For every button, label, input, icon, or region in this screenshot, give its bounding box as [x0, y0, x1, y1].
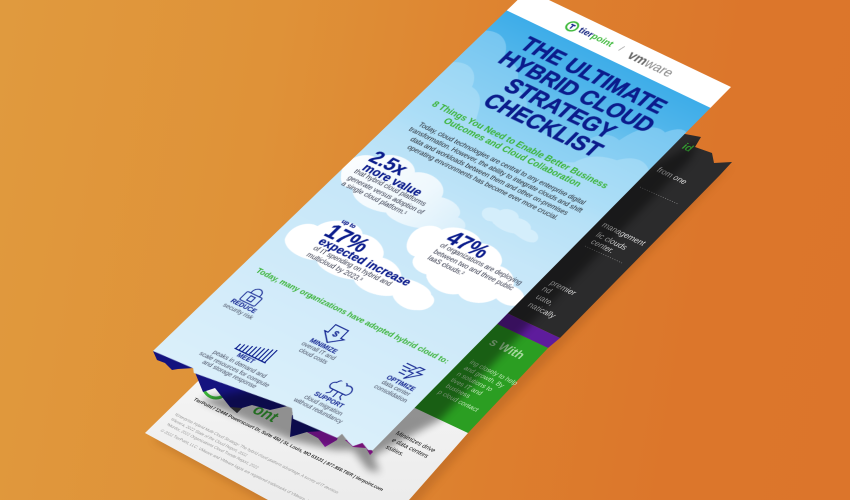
dark section of lower sheet — [490, 130, 732, 338]
magenta torn strip tip — [345, 438, 373, 455]
item: minimize: cloud costs — [297, 347, 329, 366]
stat: 47 percent — [427, 232, 523, 290]
footer sheet copy: ssities. — [383, 444, 406, 458]
stat: 17 percent — [306, 220, 410, 286]
body copy on green section — [435, 359, 519, 413]
sky clouds — [406, 30, 686, 206]
item: optimize: consolidation — [372, 384, 409, 404]
sheet shadow on background — [152, 165, 732, 500]
subtitle: Outcomes and Cloud Collaboration — [441, 116, 584, 189]
dark tear fragment — [230, 407, 242, 413]
section heading: Today, many organizations have adopted hybrid cloud to: — [254, 266, 452, 365]
item: meet: MEET — [235, 352, 257, 365]
item: support — [294, 380, 354, 424]
cloud: 2.5x — [340, 154, 466, 230]
vmware wordmark: vmware — [624, 48, 678, 80]
body copy on green section: tives IT and — [448, 377, 484, 397]
stat: 2.5x more value — [341, 151, 426, 214]
cloud: light distant — [482, 208, 538, 242]
body copy on green section: business — [443, 383, 472, 400]
footer logo fragment — [203, 372, 284, 425]
body copy on dark section: nd — [539, 284, 555, 295]
intro paragraph: operating environments has become ever more crucial. — [405, 143, 561, 221]
tierpoint wordmark: tierpoint — [576, 26, 616, 49]
footer sheet copy: Minimizes drive — [393, 430, 438, 454]
intro paragraph: Today, cloud technologies are central to any enterprise digital — [416, 121, 588, 206]
stat: 17 percent: of IT spending on hybrid and — [311, 245, 393, 288]
footer sheet copy: e data centers — [389, 437, 431, 460]
cloud: 17 percent — [284, 220, 434, 310]
body copy on dark section: center. — [588, 237, 617, 255]
title: STRATEGY — [498, 75, 621, 143]
item: support: cloud migration — [302, 394, 344, 417]
body copy on dark section: management — [599, 220, 649, 248]
stat: 17 percent: expected increase — [315, 235, 415, 289]
body copy on green section: and growth. By — [461, 365, 506, 389]
stat: 2.5x more value: 2.5x — [364, 147, 413, 179]
item: optimize: OPTIMIZE — [384, 374, 417, 393]
item: support: without redundancy — [291, 397, 344, 425]
purple band — [478, 305, 560, 348]
navy torn strip right — [290, 415, 330, 438]
green section — [398, 315, 548, 433]
stat: 2.5x more value: more value — [359, 161, 426, 199]
stat: 47 percent: IaaS clouds.² — [425, 255, 466, 277]
navy torn strip centre — [194, 370, 292, 413]
divider slash: / — [616, 45, 626, 53]
footer sheet copy — [383, 430, 438, 460]
icon: dollar down arrow: $ — [316, 322, 325, 323]
title: THE ULTIMATE — [514, 33, 672, 118]
stat: 17 percent: up to — [340, 219, 358, 230]
title — [484, 36, 669, 156]
stat: 47 percent: 47% — [441, 227, 495, 263]
footer references: ²Flexera, 2022 State of the Cloud Report, 2022 — [169, 417, 249, 458]
item: reduce: REDUCE — [228, 298, 258, 315]
background clouds — [284, 154, 538, 310]
icon: cloud migration — [325, 380, 354, 400]
footer references: ³Mordor, 2022 Organizations Cloud Trends Report, 2022 — [165, 422, 261, 470]
item: meet: peaks in demand and — [211, 349, 268, 380]
white footer section of lower sheet — [145, 340, 468, 500]
icon: dollar down arrow — [324, 324, 350, 344]
stat: 2.5x more value: that hybrid cloud platforms — [352, 168, 428, 208]
subtitle: 8 Things You Need to Enable Better Business — [429, 100, 611, 191]
green heading fragment: s With — [486, 336, 528, 362]
stat: 47 percent: of organizations are deploying — [438, 242, 524, 286]
stat: 2.5x more value: generate versus adoption of — [346, 174, 426, 216]
stat: 17 percent: 17% — [319, 220, 376, 257]
item: optimize — [374, 362, 426, 403]
body copy on dark section: premier — [547, 278, 579, 297]
icon: ascending bars — [234, 344, 278, 364]
intro paragraph: transformation. However, the ability to integrate clouds and shift — [407, 125, 585, 214]
stat: 17 percent: multicloud by 2023.³ — [305, 251, 365, 283]
footer logo fragment: ont — [248, 402, 284, 425]
icon: padlock — [239, 288, 264, 307]
cloud: 47 percent — [406, 226, 524, 306]
item: minimize: MINIMIZE — [308, 337, 339, 355]
footer references: ¹Enterprise Hybrid Multi-Cloud Strategy: The hybrid cloud platform advantage. A survey of IT decision — [173, 412, 341, 495]
body copy on dark section: from one — [654, 165, 690, 186]
item: reduce — [222, 288, 264, 320]
body copy on dark section: natically — [525, 300, 559, 320]
item: support: SUPPORT — [312, 390, 346, 410]
shadow of the checklist on lower sheet — [200, 140, 700, 472]
magenta torn strip — [307, 430, 340, 447]
body copy on dark section — [525, 165, 690, 320]
body copy on green section: p cloud contact — [435, 389, 480, 413]
item: reduce: security risk — [221, 302, 255, 321]
body copy on green section: ing closely to help — [467, 359, 519, 387]
body copy on dark section: lic clouds — [593, 230, 630, 252]
panel: checklist page — [148, 0, 731, 460]
body copy on dark section: uate, — [533, 292, 557, 307]
item: minimize — [298, 324, 350, 364]
body copy on green section: n solutions to — [454, 371, 494, 393]
item: optimize: data center — [379, 379, 412, 398]
icon: lightning bolt — [398, 362, 426, 380]
header logos — [564, 21, 672, 77]
item: minimize: overall IT and — [299, 341, 337, 362]
footer address: TierPoint / 12444 Powerscourt Dr, Suite 450 | St. Louis, MO 63131 | 877.859.TIER | tierpoint.com — [191, 397, 385, 493]
stat: 2.5x more value: a single cloud platform.¹ — [339, 181, 409, 217]
item: meet: and storage response — [200, 359, 258, 390]
stat: 47 percent: between two and three public — [432, 248, 516, 292]
green heading fragment on dark: id — [679, 142, 696, 154]
item: meet: scale resources for compute — [197, 350, 271, 389]
title: HYBRID CLOUD — [493, 47, 660, 137]
intro paragraph: data and workloads between them and other on-premises — [408, 135, 571, 217]
lower sheets: torn second page beneath the checklist — [145, 134, 732, 500]
title: CHECKLIST — [477, 89, 608, 162]
icon: tierpoint mark — [564, 21, 580, 32]
navy torn strip left — [153, 351, 194, 370]
